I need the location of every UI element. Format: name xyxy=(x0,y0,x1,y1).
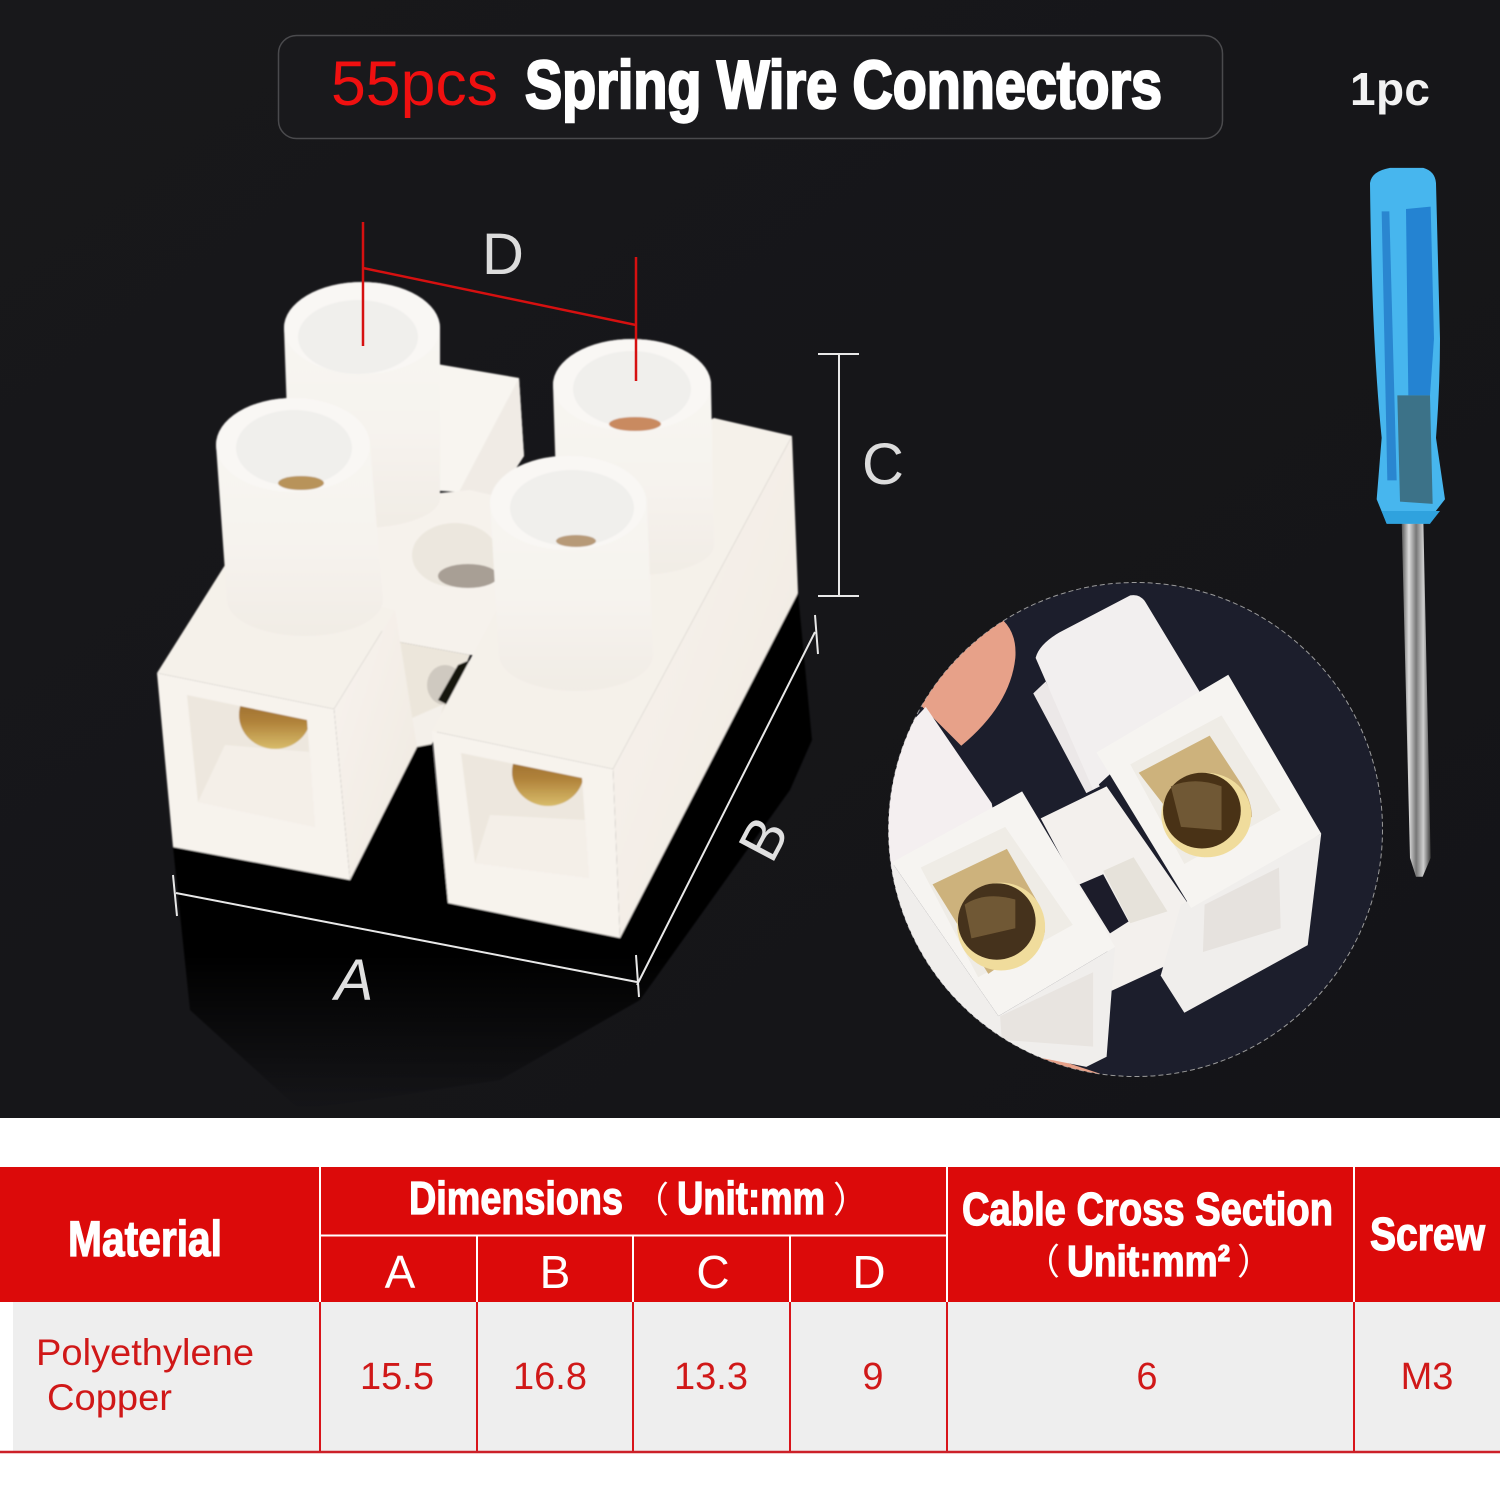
data: values: 15.5 xyxy=(360,1356,434,1398)
left block xyxy=(880,862,1115,1067)
header: dimensions: Unit:mm xyxy=(677,1172,825,1224)
quantity in title: 55pcs xyxy=(331,49,498,119)
header: cable cross section: （ xyxy=(1024,1241,1060,1282)
header: material: Material xyxy=(68,1211,222,1267)
header: cable cross section: Cable Cross Section xyxy=(962,1183,1333,1235)
shadow reflection xyxy=(173,593,812,1110)
lower gap xyxy=(388,640,470,747)
data: values: 16.8 xyxy=(513,1356,587,1398)
cylinder: front right xyxy=(490,456,653,691)
header: cable cross section: ） xyxy=(1237,1241,1273,1282)
table rule lines xyxy=(320,1167,1354,1302)
screwdriver quantity label: 1pc xyxy=(1350,63,1430,115)
header: column letters: A xyxy=(385,1246,416,1298)
right block xyxy=(432,418,792,769)
data: values: 9 xyxy=(862,1356,884,1398)
photo background xyxy=(0,0,1500,1118)
left rear cylinder xyxy=(888,707,992,865)
table data row xyxy=(13,1302,1500,1452)
centre bridge xyxy=(370,490,505,655)
title text: Spring Wire Connectors xyxy=(525,47,1162,123)
header: dimensions xyxy=(409,1172,869,1224)
cylinder: front left xyxy=(216,398,383,636)
header: column letters: D xyxy=(852,1246,886,1298)
cylinder: back right xyxy=(553,339,714,575)
bridge hole xyxy=(412,523,498,587)
dimension C xyxy=(818,354,904,596)
dimension B: B xyxy=(726,807,802,871)
gap between bridges xyxy=(1080,874,1129,933)
header: dimensions: （ xyxy=(633,1179,669,1220)
dimension D xyxy=(363,222,636,381)
finger xyxy=(922,621,1016,746)
data: values: 13.3 xyxy=(674,1356,748,1398)
dimension C: C xyxy=(862,432,904,497)
dimension A xyxy=(173,875,639,1013)
back cylinder xyxy=(1033,682,1100,793)
data: material xyxy=(36,1332,254,1418)
icon: blue screwdriver xyxy=(1370,168,1445,877)
spec table xyxy=(0,1118,1500,1500)
data: material: Copper xyxy=(47,1377,172,1418)
header: column letters xyxy=(385,1246,886,1298)
data: values: 6 xyxy=(1136,1356,1158,1398)
header: cable cross section xyxy=(962,1183,1333,1286)
title box xyxy=(278,36,1222,138)
inset circle detail xyxy=(877,582,1382,1091)
data: values: M3 xyxy=(1401,1356,1453,1398)
bridges xyxy=(1041,786,1191,991)
rear block xyxy=(425,362,524,497)
left block xyxy=(157,565,395,709)
header: dimensions: ） xyxy=(833,1179,869,1220)
header: cable cross section: Unit:mm² xyxy=(1067,1237,1230,1286)
header: dimensions: Dimensions xyxy=(409,1172,623,1224)
dimension A: A xyxy=(332,948,373,1013)
header: column letters: B xyxy=(540,1246,570,1298)
dimension B xyxy=(637,615,818,985)
header: column letters: C xyxy=(696,1246,730,1298)
table header xyxy=(0,1167,1500,1302)
cylinder: back left xyxy=(284,282,440,528)
dimension D: D xyxy=(482,222,524,287)
data: material: Polyethylene xyxy=(36,1332,254,1373)
data: values xyxy=(360,1356,1453,1398)
connector main photo xyxy=(157,282,812,1110)
right block xyxy=(1161,834,1321,1013)
